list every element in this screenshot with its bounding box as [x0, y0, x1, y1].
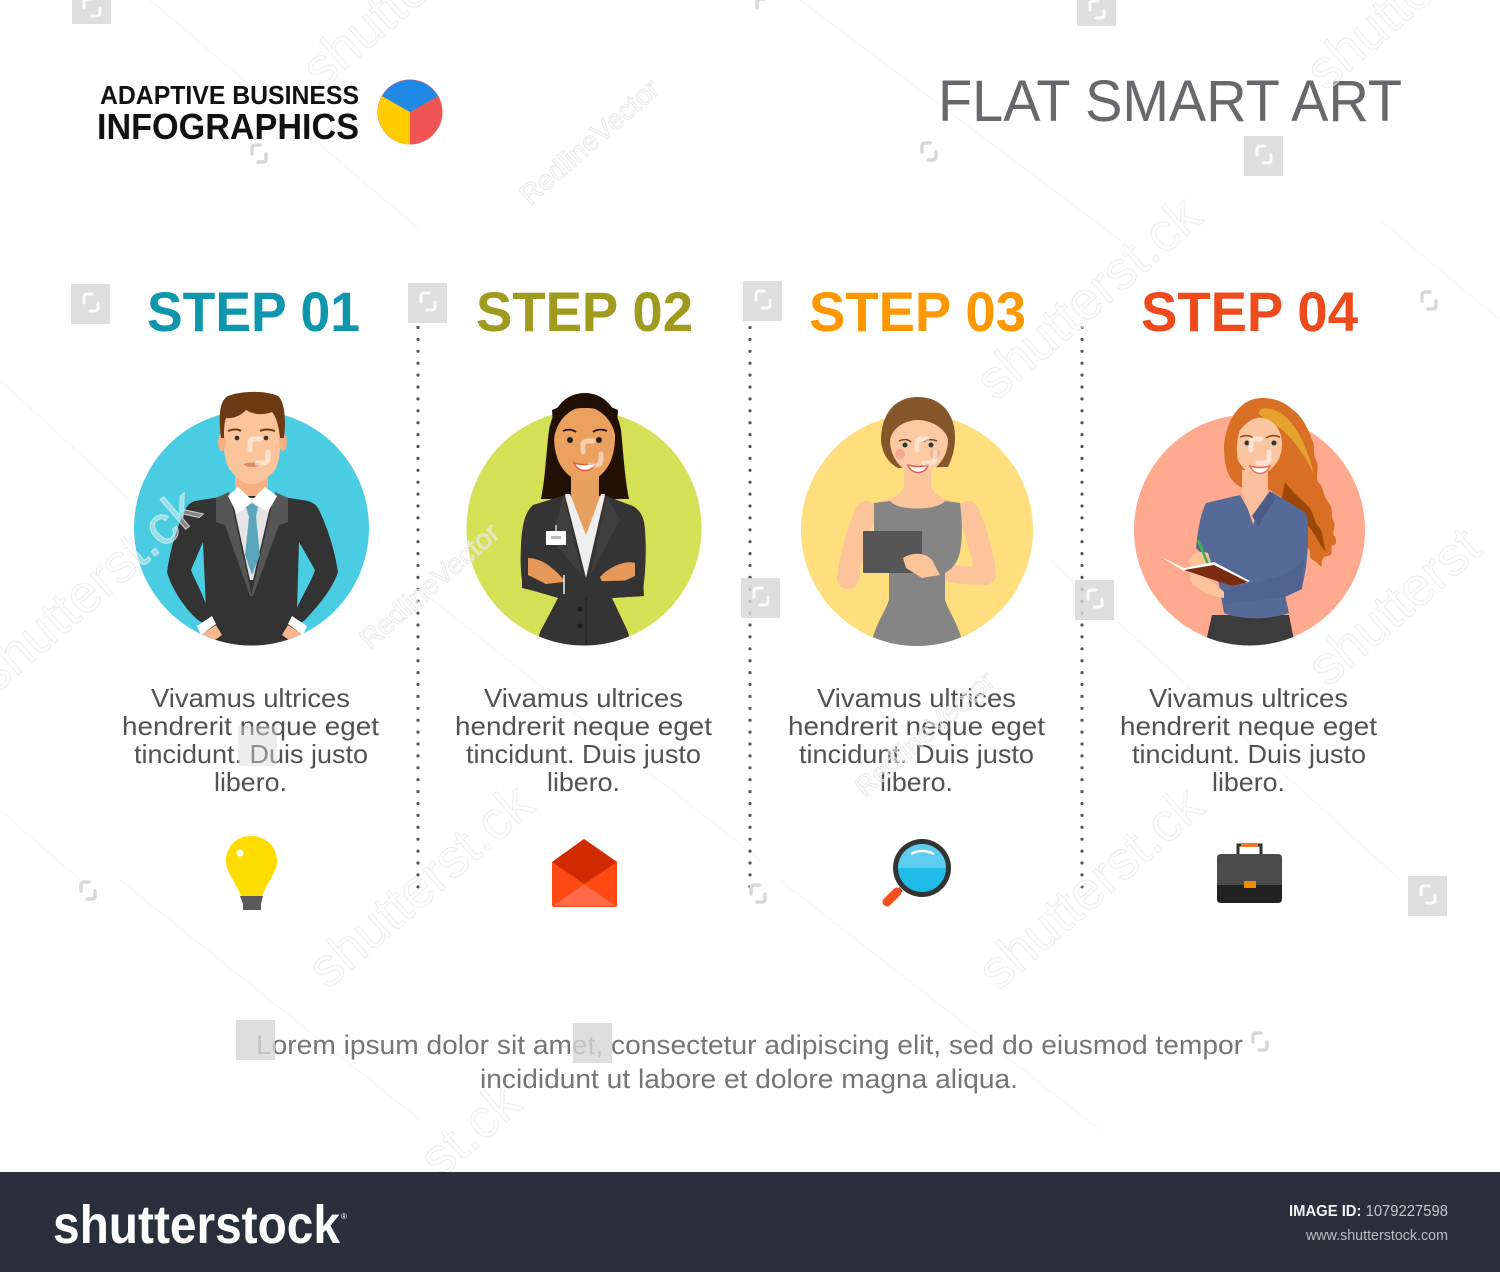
text: step 03 — [788, 683, 1046, 797]
neck — [565, 476, 605, 546]
text: step 02: Vivamus ultrices — [484, 683, 683, 713]
footer text — [256, 1030, 1243, 1094]
footer text: Lorem ipsum dolor sit amet, consectetur adipiscing elit, sed do eiusmod tempor — [256, 1030, 1243, 1060]
step descriptions — [122, 683, 1378, 797]
text: step 01 — [122, 683, 380, 797]
footer logo: shutterstock — [53, 1195, 341, 1255]
text: step 01: libero. — [214, 767, 287, 797]
watermark layer: st.ck — [409, 1070, 532, 1189]
text: step 02 — [455, 683, 713, 797]
face — [554, 408, 615, 484]
logo text: INFOGRAPHICS — [97, 106, 359, 147]
footer bar — [0, 1172, 1500, 1272]
face details — [563, 430, 607, 432]
watermark layer: shutterst — [1297, 516, 1492, 697]
face details — [899, 440, 937, 442]
hair highlight — [1257, 408, 1314, 474]
title: FLAT SMART ART — [938, 69, 1402, 134]
sleeve — [1236, 585, 1302, 602]
lapels — [216, 492, 252, 596]
text: step 04: hendrerit neque eget — [1120, 711, 1378, 741]
blouse edges — [565, 494, 605, 578]
jacket — [521, 495, 646, 650]
header logo — [97, 80, 442, 147]
back hair with curls — [1224, 398, 1336, 567]
text: step 04 — [1120, 683, 1378, 797]
hair — [220, 392, 285, 438]
shirt — [1196, 492, 1308, 618]
footer text: incididunt ut labore et dolore magna aliqua. — [480, 1064, 1018, 1094]
dotted dividers — [418, 328, 1082, 888]
right hand — [903, 554, 940, 578]
registered mark: ® — [341, 1212, 347, 1221]
hair parting — [552, 407, 618, 440]
text: step 01: Vivamus ultrices — [151, 683, 350, 713]
image id: IMAGE ID: 1079227598 — [1289, 1203, 1448, 1220]
text: step 03: Vivamus ultrices — [817, 683, 1016, 713]
cuffs and hands — [197, 616, 216, 635]
neck and shoulders — [875, 470, 959, 508]
text: step 02: libero. — [547, 767, 620, 797]
dress — [870, 501, 964, 650]
text: step 01: tincidunt. Duis justo — [134, 739, 368, 769]
neck — [1242, 470, 1268, 524]
text: step 04: Vivamus ultrices — [1149, 683, 1348, 713]
notebook — [1161, 557, 1250, 583]
jacket seams and buttons — [586, 598, 587, 645]
text: step 04: tincidunt. Duis justo — [1132, 739, 1366, 769]
portrait: woman with tablet — [801, 397, 1033, 650]
collar — [228, 487, 277, 514]
text: step 03: hendrerit neque eget — [788, 711, 1046, 741]
text: step 03: tincidunt. Duis justo — [799, 739, 1034, 769]
face details — [228, 430, 275, 431]
icon: briefcase — [1217, 843, 1282, 903]
neck — [235, 476, 268, 496]
text: step 02: tincidunt. Duis justo — [466, 739, 701, 769]
logo text: ADAPTIVE BUSINESS — [100, 80, 359, 110]
watermark layer: shutterst.ck — [967, 774, 1215, 1001]
arms — [848, 512, 985, 578]
heading: step 03: STEP 03 — [809, 280, 1026, 343]
crossed arms — [528, 558, 564, 586]
watermark layer: shutterst.ck — [297, 772, 545, 999]
portrait: woman with notebook — [1134, 398, 1365, 650]
heading: step 04: STEP 04 — [1141, 280, 1358, 343]
text: step 02: hendrerit neque eget — [455, 711, 713, 741]
hair — [881, 397, 955, 468]
text: step 01: hendrerit neque eget — [122, 711, 380, 741]
face — [890, 420, 948, 476]
text: step 04: libero. — [1212, 767, 1285, 797]
watermark layer: RedlineVector — [514, 73, 666, 211]
step headings — [147, 280, 1358, 343]
icon: magnifier — [887, 839, 951, 902]
icon: open envelope — [552, 839, 617, 907]
hair dark waves — [1282, 482, 1326, 552]
heading: step 02: STEP 02 — [476, 280, 693, 343]
watermark layer: RedlineVector — [354, 517, 506, 655]
watermark layer: RedlineVector — [849, 665, 1001, 803]
tie — [245, 503, 260, 575]
name badge — [546, 531, 566, 545]
hand and pen — [1188, 552, 1212, 572]
front hair — [1226, 402, 1264, 486]
face — [1233, 418, 1282, 476]
collar — [1252, 491, 1276, 526]
left hand — [862, 557, 863, 562]
jacket lapels — [552, 497, 620, 576]
face details — [1240, 436, 1280, 438]
text: step 03: libero. — [880, 767, 953, 797]
skirt — [1206, 615, 1294, 646]
tablet — [863, 531, 922, 573]
portrait: businessman — [134, 392, 369, 650]
lower hand — [1190, 572, 1224, 598]
portrait: woman with crossed arms — [466, 393, 702, 650]
logo pie icon — [378, 80, 442, 144]
website: www.shutterstock.com — [1305, 1228, 1448, 1244]
watermark layer: shutterst.ck — [965, 184, 1213, 411]
heading: step 01: STEP 01 — [147, 280, 360, 343]
long hair — [541, 393, 629, 499]
head — [223, 405, 281, 484]
shirt — [234, 498, 270, 580]
logo text — [97, 80, 359, 147]
icon: light bulb — [226, 836, 277, 910]
jacket — [167, 496, 338, 650]
